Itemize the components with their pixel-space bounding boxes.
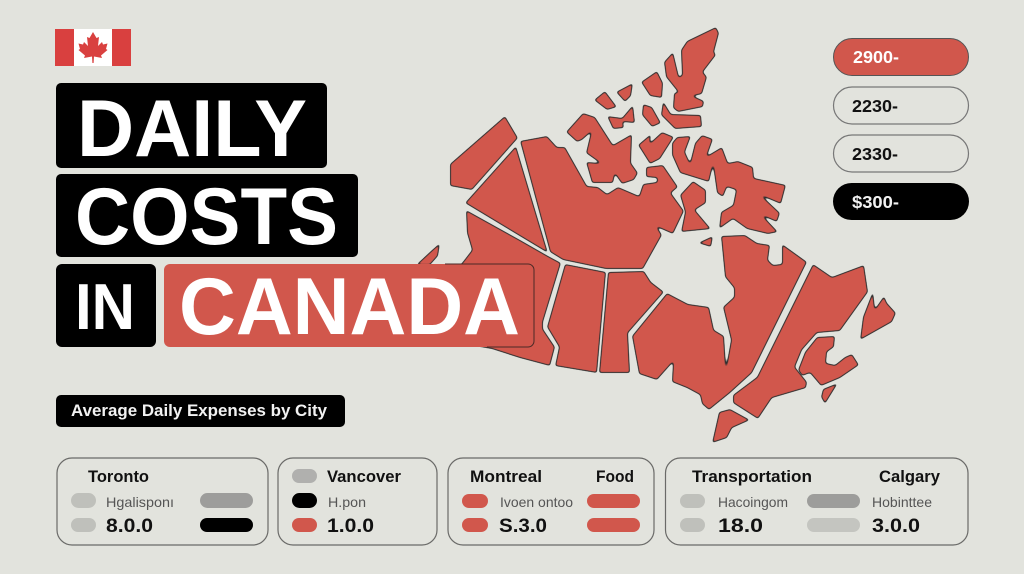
title: COSTS: COSTS bbox=[75, 172, 338, 262]
card: Montreal and Food: S.3.0 bbox=[499, 515, 547, 537]
legend pills bbox=[833, 38, 969, 220]
card: Montreal and Food: Food bbox=[596, 468, 634, 486]
card: Vancover bbox=[278, 458, 437, 545]
card: Montreal and Food: Montreal bbox=[470, 468, 542, 486]
card: Transportation and Calgary: Hacoingom bbox=[718, 494, 788, 510]
legend pill: 2900: 2900- bbox=[853, 47, 899, 67]
title: CANADA: CANADA bbox=[179, 262, 520, 352]
subtitle: Average Daily Expenses by City bbox=[71, 401, 328, 420]
legend pill: 2330 bbox=[834, 135, 968, 172]
legend pill: 2900 bbox=[834, 38, 968, 76]
legend pill: $300: $300- bbox=[852, 192, 899, 212]
legend pill: 2230: 2230- bbox=[852, 96, 898, 116]
legend pill: $300 bbox=[833, 183, 969, 220]
card: Transportation and Calgary: Hobinttee bbox=[872, 494, 932, 510]
card: Toronto: Hgalisponı bbox=[106, 494, 174, 510]
title: IN bbox=[56, 264, 156, 347]
subtitle bbox=[56, 395, 345, 427]
card: Montreal and Food bbox=[448, 458, 654, 545]
card: Transportation and Calgary: Transportation bbox=[692, 468, 812, 486]
legend pill: 2230 bbox=[834, 87, 968, 124]
title: IN: IN bbox=[75, 270, 135, 343]
card: Vancover: Vancover bbox=[327, 468, 402, 486]
card: Transportation and Calgary: Calgary bbox=[879, 468, 941, 486]
icon: Canadian flag bbox=[55, 29, 131, 66]
card: Toronto bbox=[57, 458, 268, 545]
card: Toronto: 8.0.0 bbox=[106, 515, 153, 537]
legend pill: 2330: 2330- bbox=[852, 144, 898, 164]
card: Toronto: Toronto bbox=[88, 468, 149, 486]
card: Vancover: 1.0.0 bbox=[327, 515, 374, 537]
card: Montreal and Food: Ivoen ontoo bbox=[500, 494, 573, 510]
map of Canada bbox=[416, 27, 896, 443]
title: DAILY: DAILY bbox=[77, 84, 307, 174]
card: Vancover: H.pon bbox=[328, 494, 366, 510]
card: Transportation and Calgary bbox=[666, 458, 968, 545]
card: Transportation and Calgary: 3.0.0 bbox=[872, 515, 920, 537]
card: Transportation and Calgary: 18.0 bbox=[718, 515, 763, 537]
